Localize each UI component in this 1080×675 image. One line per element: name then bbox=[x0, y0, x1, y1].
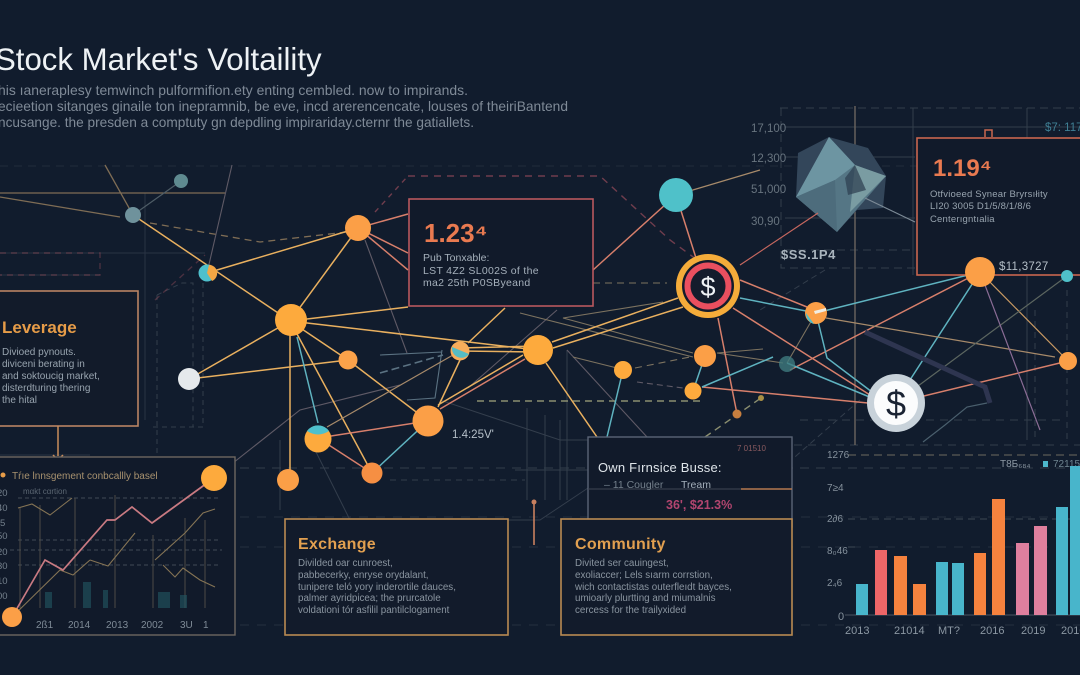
bar chart: 7≥4 bbox=[827, 483, 844, 494]
intro text block bbox=[0, 82, 568, 130]
panel: Own Finance card bbox=[588, 437, 792, 527]
axis labels upper right bbox=[751, 122, 1080, 228]
panel: Leverage: Leverage bbox=[2, 318, 77, 337]
panel: line chart: 2002 bbox=[141, 620, 164, 631]
arrow: leverage to chart bbox=[53, 426, 63, 460]
bar chart: T8Б₆₈₄ bbox=[1000, 459, 1030, 470]
node labels bbox=[452, 261, 1049, 441]
panel: line chart: 3U bbox=[180, 620, 193, 631]
panel: 1.194 callout: LI20 3005 D1/5/8/1/8/6 bbox=[930, 201, 1031, 212]
bar chart: 2₄6 bbox=[827, 578, 843, 589]
icon: dollar coin orange ring bbox=[676, 254, 740, 318]
node labels: 1.4:25V' bbox=[452, 429, 494, 441]
intro text block: his ıaneraplesy temwinch pulformifion.ety enting cembled. now to impirands. bbox=[0, 82, 468, 98]
panel: Exchange: Divilded oar cunroest, bbox=[298, 558, 393, 569]
bar chart: 2∂6 bbox=[827, 514, 844, 525]
panel: Own Finance card: Own Fırnsice Busse: bbox=[598, 460, 722, 475]
panel: line chart bbox=[0, 457, 235, 635]
bar chart: 1276 bbox=[827, 450, 850, 461]
panel: 1.23 callout: Pub Tonxable: bbox=[423, 252, 489, 264]
bar chart: 0 bbox=[838, 611, 844, 623]
panel: line chart: mαkt cαrtion bbox=[23, 487, 67, 496]
icon: dollar coin white bbox=[867, 374, 925, 432]
bar chart: 2019 bbox=[1021, 625, 1045, 637]
intro text block: ecieetion sitanges ginaile ton inepramnib, be eve, incd arerencencate, louses of theiriBantend bbox=[0, 98, 568, 114]
panel: Leverage: Divioed pynouts. bbox=[2, 347, 76, 358]
panel: 1.23 callout: 1.23⁴ bbox=[424, 218, 487, 248]
panel: Community: wich contactistas outerfleıdt bayces, bbox=[574, 582, 732, 593]
panel: Leverage: and soktoucig market, bbox=[2, 371, 100, 382]
axis labels upper right: 51,000 bbox=[751, 184, 786, 196]
panel: Community bbox=[561, 519, 792, 635]
panel: 1.23 callout: LST 4Z2 SL002S of the bbox=[423, 265, 539, 277]
panel: Exchange: palmer ayridpicea; the prurcatole bbox=[298, 593, 441, 604]
bar chart: 2016 bbox=[980, 625, 1004, 637]
panel: 1.23 callout bbox=[409, 199, 593, 306]
panel: Own Finance card: Tream bbox=[681, 479, 711, 491]
panel: line chart: 2ß1 bbox=[36, 620, 54, 631]
network nodes bbox=[2, 174, 1077, 627]
icon: dollar coin white: $ bbox=[886, 383, 906, 424]
bar chart: 8₀46 bbox=[827, 546, 848, 557]
panel: Exchange: voldationi tór asfilil pantilclogament bbox=[298, 605, 450, 616]
panel: Exchange bbox=[285, 519, 508, 635]
panel: Leverage: disterdturing thering bbox=[2, 383, 90, 394]
panel: Exchange: Exchange bbox=[298, 536, 376, 553]
axis labels upper right: 12,300 bbox=[751, 153, 786, 165]
bar chart bbox=[827, 450, 1080, 637]
panel: 1.194 callout bbox=[917, 130, 1080, 275]
panel: line chart: 2013 bbox=[106, 620, 129, 631]
panel: 1.23 callout: ma2 25th P0SByeand bbox=[423, 277, 531, 289]
panel: line chart: Tŕıe lnnsgement conbcallly basel bbox=[12, 471, 158, 482]
icon: polyhedron bbox=[796, 137, 886, 232]
panel: line chart: 1 bbox=[203, 620, 209, 631]
panel: Community: umioarly plurtting and miumalnis bbox=[575, 593, 716, 604]
panel: 1.194 callout: Otfvioeed Synear Bryrsıłity bbox=[930, 189, 1048, 200]
price label: $SS.1P4 bbox=[781, 247, 836, 262]
bar chart: 2013 bbox=[845, 625, 869, 637]
panel: 1.194 callout: 1.19⁴ bbox=[933, 155, 992, 182]
panel: Community: exoliaccer; Lels sıarm corrstion, bbox=[575, 570, 713, 581]
panel: Leverage: diviceni berating in bbox=[2, 359, 85, 370]
bar chart: 72115 bbox=[1053, 459, 1080, 470]
panel: Exchange: tunipere teló yory inderortile dauces, bbox=[298, 582, 456, 593]
panel: Leverage bbox=[0, 291, 138, 426]
bar chart: 21014 bbox=[894, 625, 925, 637]
intro text block: ncusange. the presden a comptuty gn depdling impirariday.cternr the gatiallets. bbox=[0, 114, 474, 130]
axis labels upper right: 30,90 bbox=[751, 216, 780, 228]
node labels: $11,3727 bbox=[999, 261, 1049, 273]
panel: Community: cercess for the trailyxided bbox=[575, 605, 686, 616]
axis labels upper right: 17,100 bbox=[751, 123, 786, 135]
network links bbox=[133, 165, 1080, 480]
panel: Own Finance card: – 11 Cougler bbox=[604, 479, 664, 491]
icon: dollar coin orange ring: $ bbox=[700, 272, 716, 302]
panel: Community: Community bbox=[575, 536, 666, 553]
panel: Own Finance card: 7 01510 bbox=[737, 444, 766, 453]
panel: Own Finance card: 36', $21.3% bbox=[666, 498, 732, 512]
panel: line chart: 5 bbox=[0, 518, 5, 529]
panel: 1.194 callout: Centerıgntıalia bbox=[930, 214, 995, 225]
panel: Exchange: pabbecerky, enryse orydalant, bbox=[298, 570, 429, 581]
bar chart: MT? bbox=[938, 625, 960, 637]
panel: line chart: 2014 bbox=[68, 620, 91, 631]
panel: Leverage: the hital bbox=[2, 395, 37, 406]
title: Stock Market's Voltaility bbox=[0, 42, 322, 77]
panel: Community: Divited ser cauingest, bbox=[575, 558, 669, 569]
